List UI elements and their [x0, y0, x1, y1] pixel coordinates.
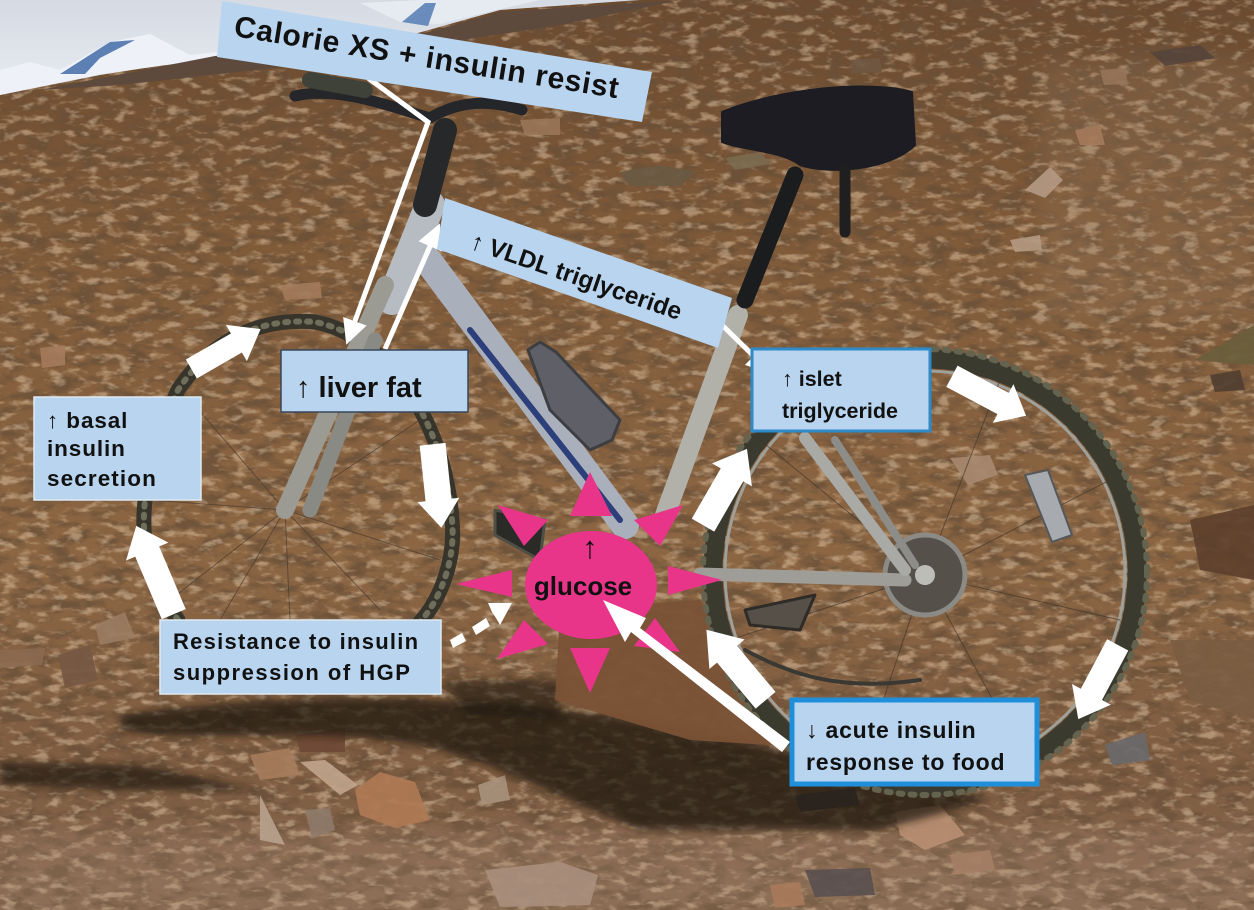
label: resistance to insulin suppression of HGP: Resistance to insulin	[173, 629, 419, 654]
block arrow: front wheel down	[412, 442, 462, 530]
arrow: acute insulin to glucose	[603, 600, 790, 752]
label: acute insulin response: response to food	[806, 749, 1005, 775]
label: acute insulin response	[792, 700, 1037, 784]
label: liver fat: ↑ liver fat	[296, 372, 422, 404]
glucose label: glucose	[534, 571, 632, 601]
label: basal insulin secretion: secretion	[47, 466, 157, 491]
rear wheel	[703, 349, 1147, 795]
label: calorie excess: Calorie XS + insulin resist	[232, 10, 622, 105]
label: basal insulin secretion	[34, 397, 201, 500]
block arrow: up to basal insulin	[115, 517, 195, 623]
thin connector: VLDL to islet	[722, 325, 768, 370]
block arrow: rear wheel right	[942, 357, 1036, 435]
label: islet triglyceride	[752, 349, 930, 431]
label: acute insulin response: ↓ acute insulin	[806, 717, 976, 743]
background: ground shadows	[0, 600, 990, 830]
stem and handlebar	[425, 130, 445, 205]
bicycle	[144, 80, 1147, 795]
frame tubes	[420, 250, 625, 525]
glucose disc	[525, 531, 657, 639]
seat post and saddle	[745, 175, 795, 300]
fork	[285, 285, 385, 510]
label: resistance to insulin suppression of HGP: suppression of HGP	[173, 660, 411, 685]
block arrow: acute response to glucose cycle	[689, 615, 783, 715]
label: VLDL triglyceride	[437, 198, 732, 348]
label: basal insulin secretion: ↑ basal	[47, 408, 128, 433]
label: islet triglyceride: triglyceride	[782, 399, 898, 423]
thin connector: liver fat to VLDL	[385, 228, 438, 349]
crank and pedal	[495, 510, 545, 560]
front wheel	[144, 321, 453, 622]
dashed arrow: resistance to glucose	[450, 603, 512, 648]
cassette	[885, 535, 965, 615]
block arrow: liver fat cycle up	[181, 311, 271, 387]
label: resistance to insulin suppression of HGP	[160, 620, 441, 694]
up arrow: ↑	[582, 530, 598, 565]
background: sky and snowy mountains	[0, 0, 680, 95]
thin connector: calorie excess to liver fat	[348, 78, 428, 340]
label: liver fat	[281, 350, 468, 412]
label: VLDL triglyceride: ↑ VLDL triglyceride	[467, 228, 685, 326]
bottle	[528, 342, 620, 450]
burst rays	[456, 472, 722, 693]
label: islet triglyceride: ↑ islet	[782, 367, 842, 391]
block arrow: rear wheel down	[1059, 635, 1137, 729]
label: basal insulin secretion: insulin	[47, 436, 126, 461]
glucose burst	[456, 472, 722, 693]
block arrow: up to islet triglyceride	[683, 437, 767, 537]
